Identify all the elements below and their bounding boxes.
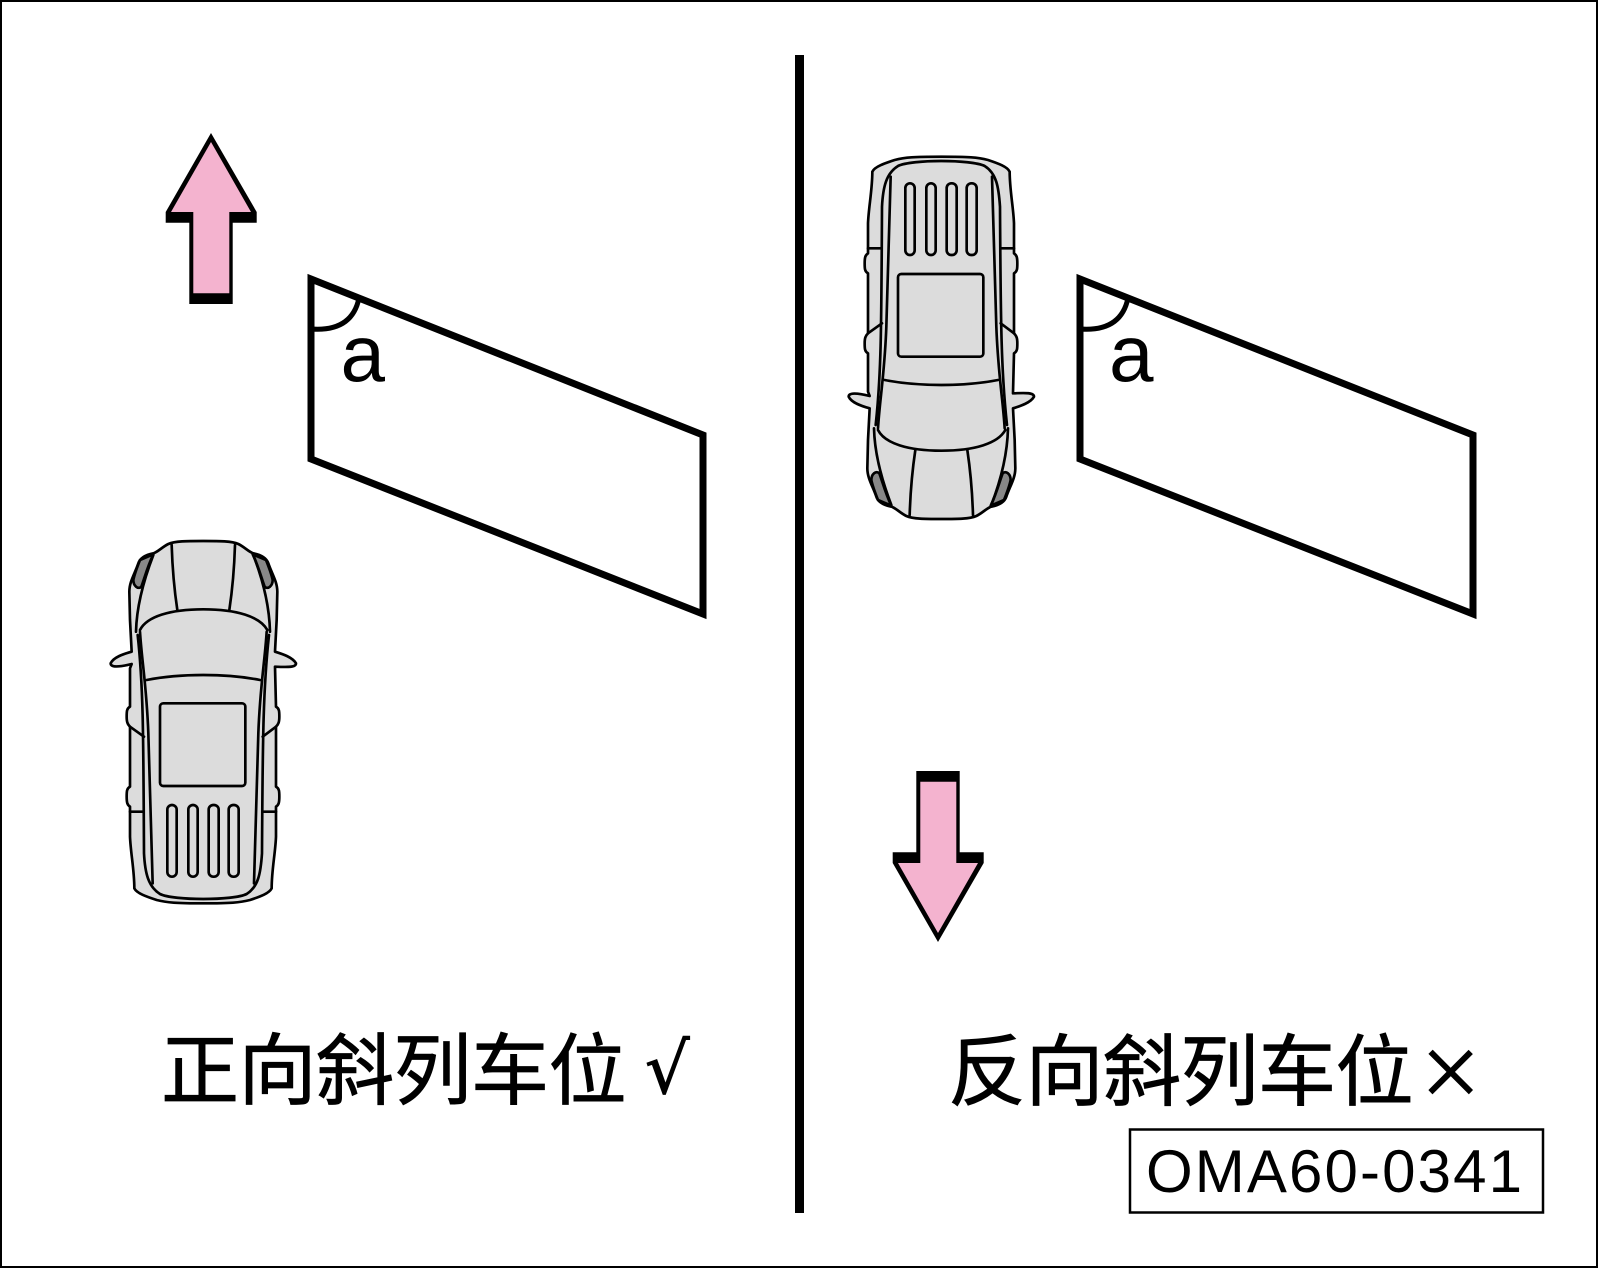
panel: forward angled parking xyxy=(111,133,703,1115)
panel: reverse angled parking xyxy=(849,157,1543,1212)
arrow: driving direction down xyxy=(893,771,984,942)
caption: forward angled parking correct: 正向斜列车位 xyxy=(161,1027,626,1115)
angle label a: a xyxy=(340,309,386,398)
icon: car facing up xyxy=(111,541,296,903)
caption: reverse angled parking wrong xyxy=(948,1013,1481,1130)
angle label a: a xyxy=(1109,309,1154,398)
reference code box: OMA60-0341 xyxy=(1146,1138,1522,1205)
parking space right xyxy=(1080,279,1473,614)
arrow: driving direction up xyxy=(166,133,257,304)
sunroof xyxy=(160,703,245,786)
parking space left xyxy=(311,279,703,614)
roof slots xyxy=(167,805,239,877)
check mark: √ xyxy=(645,1028,690,1110)
icon: car facing down xyxy=(849,157,1034,519)
sunroof xyxy=(898,274,983,357)
cross mark: × xyxy=(1420,1013,1481,1130)
caption: reverse angled parking wrong: 反向斜列车位 xyxy=(948,1028,1413,1116)
roof slots xyxy=(905,183,977,255)
central divider xyxy=(795,55,804,1213)
